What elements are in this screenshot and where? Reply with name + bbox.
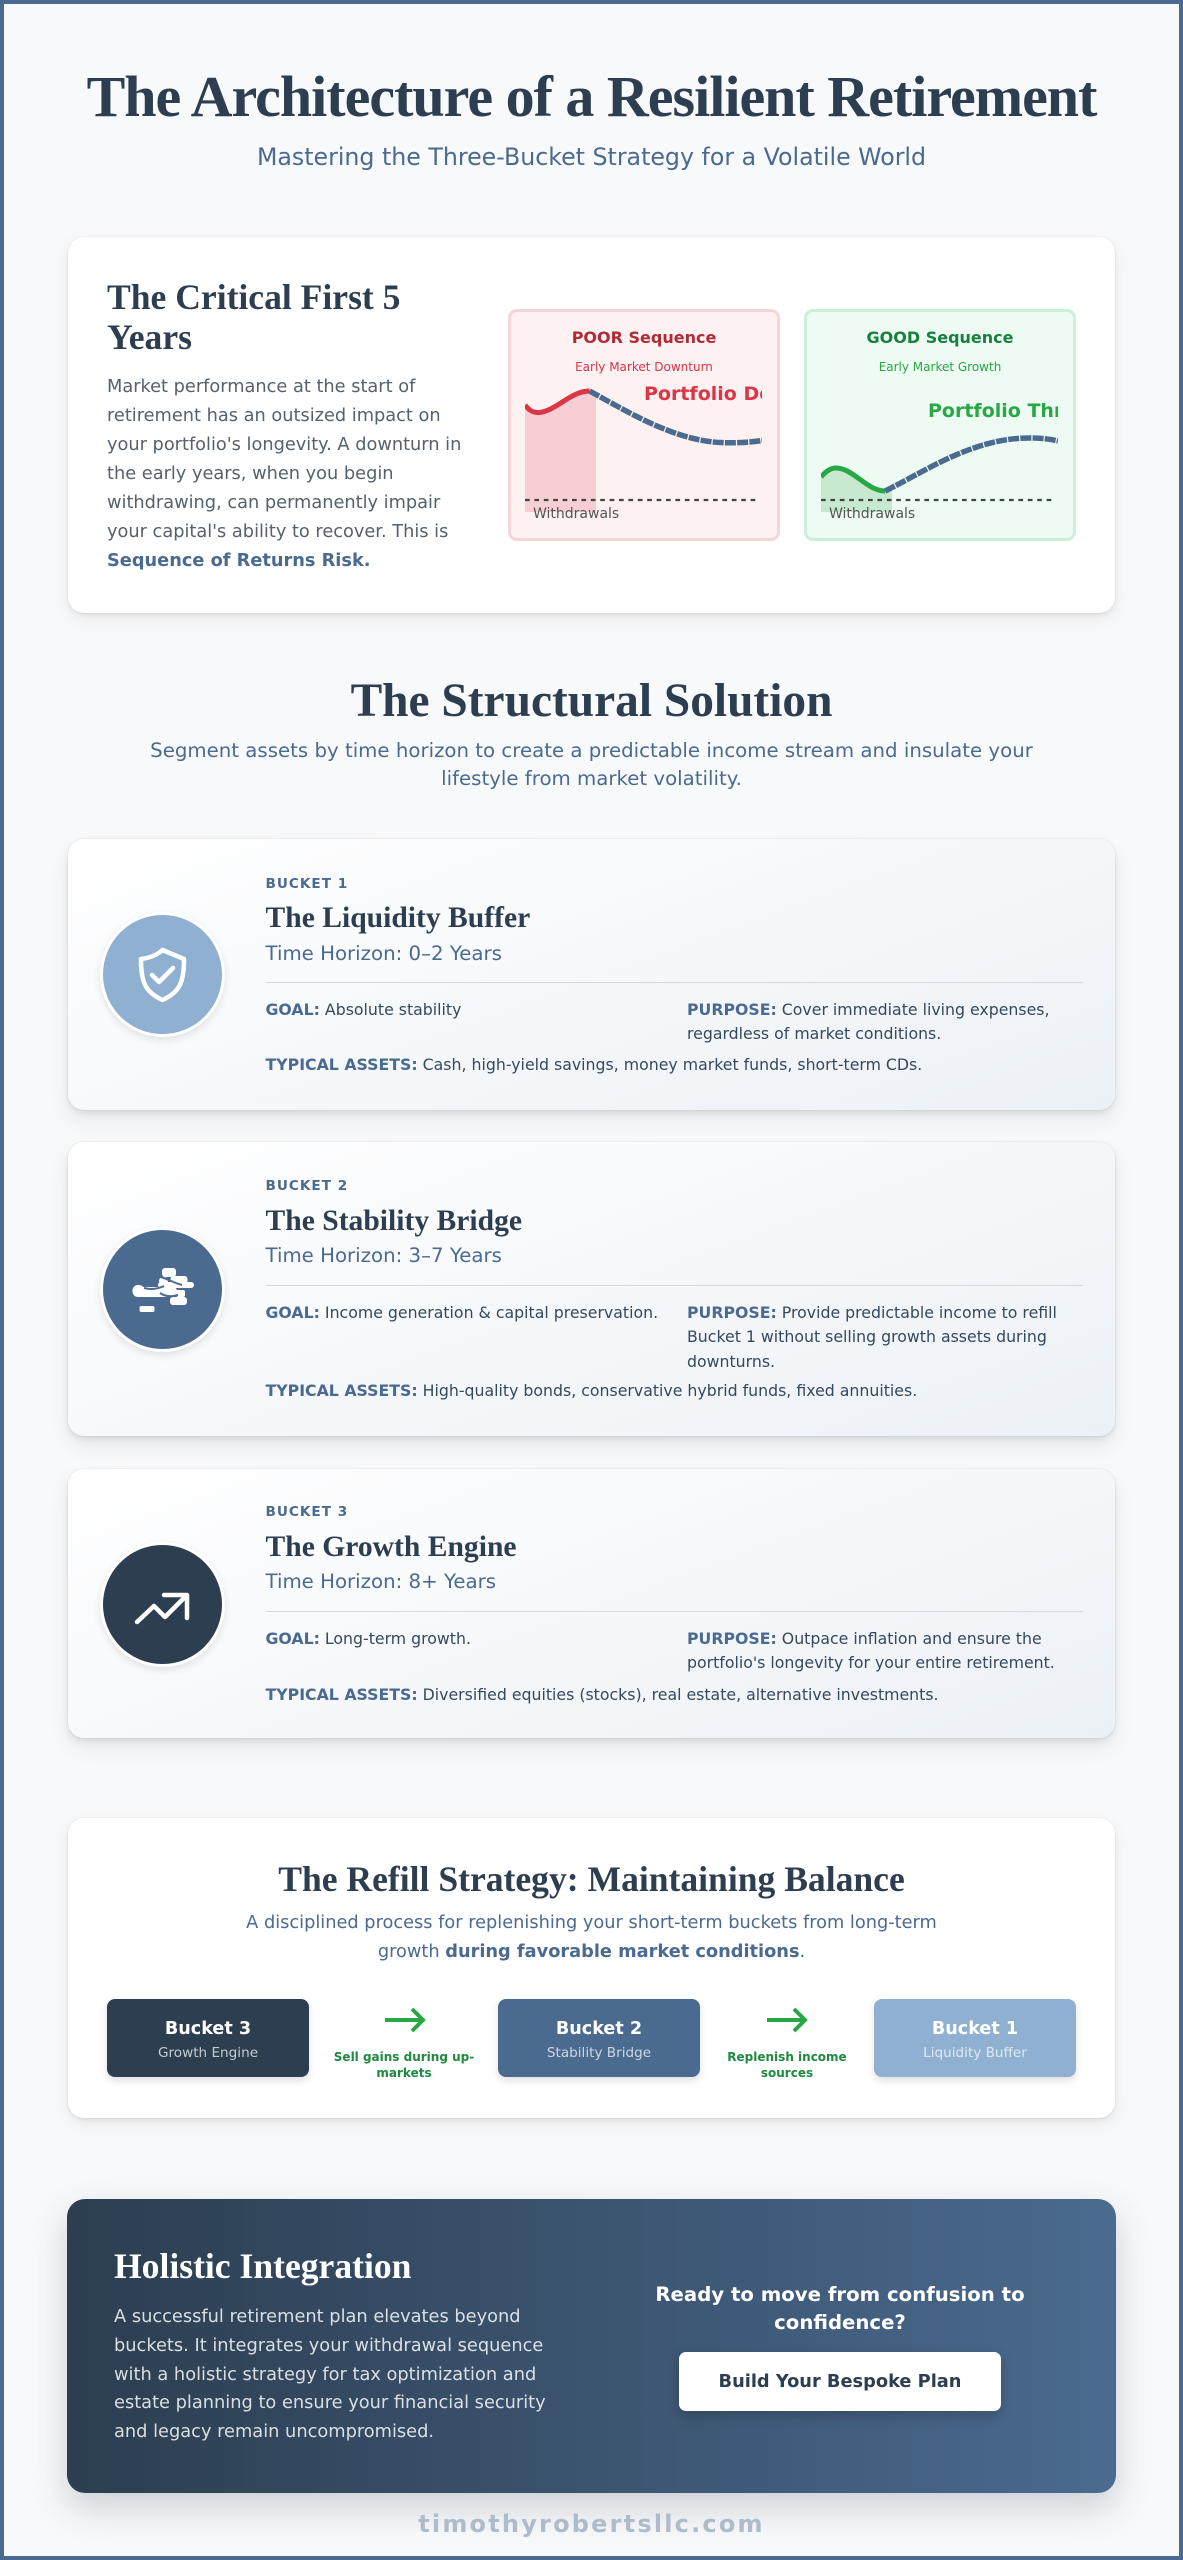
heading: critical first 5 years <box>107 277 400 357</box>
arrow: bucket 2 to bucket 1 <box>767 2008 808 2032</box>
purpose: regardless of market conditions. <box>687 1024 941 1043</box>
panel: the critical first 5 years <box>68 237 1115 613</box>
chart heading: poor sequence: POOR Sequence <box>572 328 716 347</box>
text block: refill description <box>246 1913 937 1962</box>
goal: GOAL: Absolute stability <box>266 1000 461 1019</box>
heading: critical first 5 years: The Critical First 5 <box>107 277 400 317</box>
purpose <box>687 1303 1057 1371</box>
flow box: bucket 1 <box>874 1999 1076 2077</box>
goal: GOAL: Income generation & capital preservation. <box>266 1303 658 1322</box>
text block: refill description: growth during favorable market conditions. <box>378 1942 805 1962</box>
flow box: bucket 3: Growth Engine <box>158 2045 258 2061</box>
section heading: the structural solution: The Structural Solution <box>351 675 832 727</box>
text block: sequence of returns risk: the early years, when you begin <box>107 464 394 484</box>
title: The Architecture of a Resilient Retirement <box>87 64 1096 129</box>
heading: the growth engine: The Growth Engine <box>266 1531 517 1563</box>
flow box: bucket 2: Bucket 2 <box>556 2019 642 2039</box>
purpose: PURPOSE: Outpace inflation and ensure the <box>687 1629 1042 1648</box>
heading: the stability bridge: The Stability Bridge <box>266 1204 522 1236</box>
heading: refill strategy: The Refill Strategy: Maintaining Balance <box>278 1859 905 1899</box>
text block: sequence of returns risk: your capital's ability to recover. This is <box>107 522 448 542</box>
panel: bucket 2: Time Horizon: 3–7 Years <box>266 1244 502 1266</box>
panel: bucket 3 <box>68 1469 1115 1738</box>
flow box: bucket 1: Bucket 1 <box>932 2019 1018 2039</box>
text block: refill description: A disciplined process for replenishing your short-term buckets from long-term <box>246 1913 937 1933</box>
heading: holistic integration: Holistic Integration <box>114 2246 411 2286</box>
icon: shield with check <box>100 912 224 1037</box>
purpose: PURPOSE: Cover immediate living expenses, <box>687 1000 1050 1019</box>
panel: bucket 2 <box>68 1142 1115 1436</box>
chart heading: good sequence: GOOD Sequence <box>866 328 1013 347</box>
flow box: bucket 2: Stability Bridge <box>547 2045 651 2061</box>
button: build your bespoke plan <box>679 2352 1001 2411</box>
footer: website: timothyrobertsllc.com <box>418 2510 765 2538</box>
flow label: sell gains <box>334 2050 474 2080</box>
section intro text: Segment assets by time horizon to create a predictable income stream and insulate your <box>150 739 1033 762</box>
subtitle: Mastering the Three-Bucket Strategy for a Volatile World <box>257 143 926 171</box>
typical assets: TYPICAL ASSETS: Diversified equities (stocks), real estate, alternative investments. <box>266 1685 939 1704</box>
label: bucket 3: BUCKET 3 <box>266 1504 348 1520</box>
purpose: Bucket 1 without selling growth assets during <box>687 1327 1047 1346</box>
flow label: sell gains: markets <box>376 2066 432 2080</box>
icon: stacked coins <box>100 1227 224 1352</box>
chart subheading: early market downturn: Early Market Downturn <box>575 360 713 374</box>
text block: sequence of returns risk: retirement has an outsized impact on <box>107 406 441 426</box>
text block: sequence of returns risk: Market performance at the start of <box>107 376 415 396</box>
panel: the refill strategy <box>68 1818 1115 2118</box>
purpose <box>687 1000 1050 1043</box>
text block: holistic description: buckets. It integrates your withdrawal sequence <box>114 2335 543 2356</box>
label: bucket 1: BUCKET 1 <box>266 876 348 892</box>
typical assets: TYPICAL ASSETS: High-quality bonds, conservative hybrid funds, fixed annuities. <box>266 1381 917 1400</box>
flow box: bucket 1: Liquidity Buffer <box>923 2045 1027 2061</box>
panel: bucket 1 <box>68 839 1115 1110</box>
call to action text: confidence? <box>774 2311 906 2334</box>
button: build your bespoke plan: Build Your Bespoke Plan <box>719 2371 961 2392</box>
purpose: PURPOSE: Provide predictable income to refill <box>687 1303 1057 1322</box>
text block: holistic description: and legacy remain uncompromised. <box>114 2421 434 2442</box>
call to action text <box>655 2283 1025 2334</box>
text block: holistic description: estate planning to ensure your financial security <box>114 2392 546 2413</box>
text block: holistic description: A successful retirement plan elevates beyond <box>114 2306 521 2327</box>
call to action text: Ready to move from confusion to <box>655 2283 1025 2306</box>
flow label: replenish income: Replenish income <box>727 2050 847 2064</box>
typical assets: TYPICAL ASSETS: Cash, high-yield savings, money market funds, short-term CDs. <box>266 1055 922 1074</box>
chart panel: poor sequence <box>508 309 780 541</box>
panel: bucket 3: Time Horizon: 8+ Years <box>266 1570 496 1592</box>
arrow: bucket 3 to bucket 2 <box>385 2008 426 2032</box>
text block: sequence of returns risk: withdrawing, can permanently impair <box>107 492 440 512</box>
chart panel: good sequence <box>804 309 1076 541</box>
flow box: bucket 2 <box>498 1999 700 2077</box>
text block: holistic description: with a holistic strategy for tax optimization and <box>114 2364 536 2385</box>
panel: bucket 1: Time Horizon: 0–2 Years <box>266 942 502 964</box>
heading: the liquidity buffer: The Liquidity Buffer <box>266 902 530 934</box>
line chart: poor sequence curve <box>525 383 762 520</box>
flow box: bucket 3 <box>107 1999 309 2077</box>
heading: critical first 5 years: Years <box>107 317 192 357</box>
flow box: bucket 3: Bucket 3 <box>165 2019 251 2039</box>
purpose: downturns. <box>687 1352 775 1371</box>
text block: sequence of returns risk: your portfolio's longevity. A downturn in <box>107 434 461 454</box>
icon: trending up arrow <box>100 1542 224 1667</box>
flow label: replenish income: sources <box>761 2066 813 2080</box>
panel: holistic integration call to action <box>67 2199 1116 2493</box>
line chart: good sequence curve <box>821 400 1058 520</box>
text block: sequence of returns risk <box>107 376 461 570</box>
section intro text <box>150 739 1033 790</box>
flow label: sell gains: Sell gains during up- <box>334 2050 474 2064</box>
text block: holistic description <box>114 2306 546 2442</box>
chart subheading: early market growth: Early Market Growth <box>879 360 1001 374</box>
section intro text: lifestyle from market volatility. <box>441 767 742 790</box>
goal: GOAL: Long-term growth. <box>266 1629 471 1648</box>
purpose <box>687 1629 1055 1672</box>
text block: sequence of returns risk: Sequence of Returns Risk. <box>107 550 371 570</box>
flow label: replenish income <box>727 2050 847 2080</box>
purpose: portfolio's longevity for your entire retirement. <box>687 1653 1055 1672</box>
label: bucket 2: BUCKET 2 <box>266 1178 348 1194</box>
